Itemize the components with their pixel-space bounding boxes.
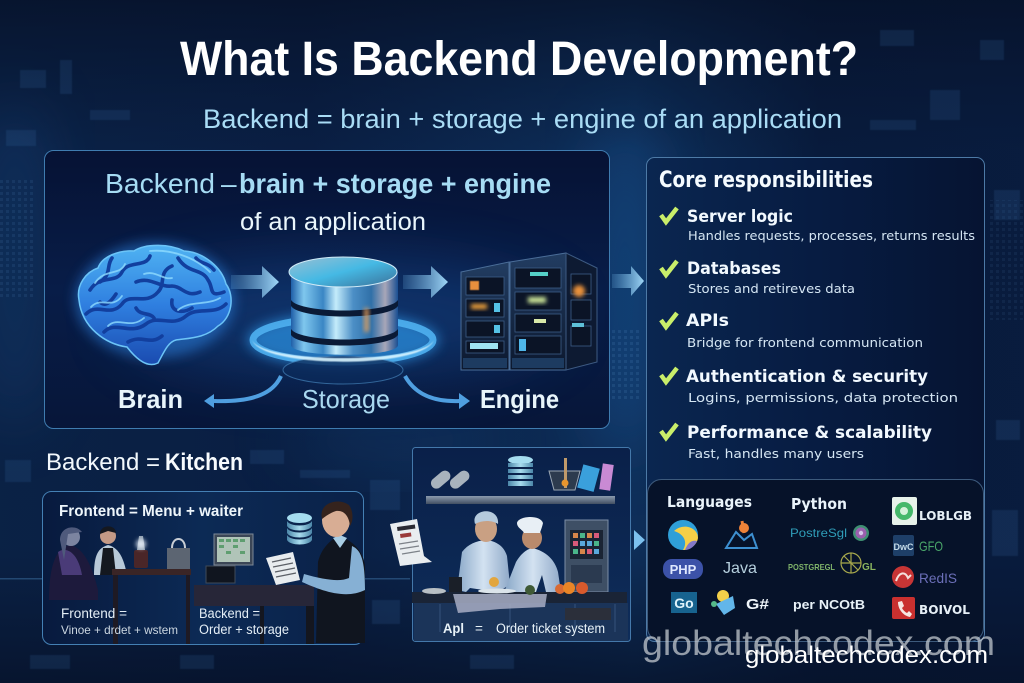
label: gl: GL	[862, 562, 876, 573]
icon: brain	[75, 242, 235, 365]
icon: green tile	[892, 497, 917, 525]
label: postresgl: PostreSgl	[790, 526, 847, 540]
item: server logic: Server logic	[687, 207, 793, 227]
item: databases: Databases	[687, 259, 781, 279]
illustration: fridge display	[565, 520, 608, 592]
icon: storage cylinder	[247, 257, 439, 384]
icon: kitchen database	[508, 456, 533, 486]
icon: globe	[841, 553, 861, 573]
arrow: storage to brain	[204, 376, 281, 408]
label: per ncotb: per NCOtB	[793, 597, 865, 612]
panel heading	[105, 168, 551, 236]
item: performance	[661, 423, 932, 461]
icon: java book	[726, 521, 757, 548]
label: boivol: BOIVOL	[919, 602, 970, 617]
item: performance: Fast, handles many users	[688, 446, 864, 461]
label: backend note	[199, 606, 289, 637]
panel: brain storage engine	[44, 150, 644, 428]
item: authentication	[661, 367, 958, 405]
illustration: kitchen counter	[412, 577, 628, 641]
arrow: to core responsibilities	[612, 266, 644, 296]
item: server logic: Handles requests, processes, returns results	[688, 228, 975, 243]
icon: server racks	[461, 253, 597, 370]
subtitle: Backend = brain + storage + engine of an application	[203, 104, 842, 134]
watermark: large: globaltechcodex.com	[642, 624, 995, 663]
label: frontend note	[61, 606, 178, 637]
arrow: kitchen to tech	[634, 530, 645, 550]
panel: technology logos	[648, 480, 984, 642]
shelf	[426, 496, 615, 504]
icon: database stack	[287, 513, 312, 544]
panel heading: brain + storage + engine	[239, 168, 551, 199]
panel heading: of an application	[240, 208, 426, 236]
item: apis	[661, 311, 923, 350]
illustration: chef left	[457, 511, 510, 592]
label: languages: Languages	[667, 493, 752, 511]
icon: round language logo	[668, 520, 698, 550]
panel: kitchen	[412, 448, 630, 642]
item: authentication: Authentication & security	[686, 367, 928, 387]
icon: feather logo	[711, 590, 735, 615]
illustration: waiter	[302, 501, 365, 643]
icon: php badge: PHP	[670, 562, 697, 577]
item: server logic	[661, 207, 975, 243]
label: frontend note: Frontend =	[61, 606, 127, 621]
item: apis: Bridge for frontend communication	[687, 335, 923, 350]
heading: backend kitchen	[46, 449, 243, 476]
label: engine: Engine	[480, 384, 559, 414]
icon: phone tile	[892, 597, 915, 619]
label: loblgb: LOBLGB	[919, 508, 972, 523]
icon: redis	[892, 566, 914, 588]
icon: order ticket	[390, 519, 432, 566]
item: databases	[661, 259, 855, 296]
icon: php badge	[663, 559, 703, 579]
panel: core responsibilities	[646, 158, 984, 642]
title: What Is Backend Development?	[180, 33, 858, 86]
label: brain: Brain	[118, 384, 183, 414]
panel: frontend and backend restaurant	[42, 492, 365, 644]
label: storage: Storage	[302, 384, 390, 414]
label: backend note: Order + storage	[199, 622, 289, 637]
panel heading: –	[221, 168, 237, 199]
label: frontend note: Vinoe + drdet + wstem	[61, 623, 178, 637]
label: g sharp: G#	[746, 596, 770, 613]
label: api order ticket system: Apl	[443, 621, 464, 636]
label: api order ticket system: Order ticket system	[496, 621, 605, 636]
item: authentication: Logins, permissions, data protection	[688, 390, 958, 405]
label: frontend menu waiter: Frontend = Menu + waiter	[59, 503, 243, 520]
icon: purple ring	[853, 525, 869, 541]
item: performance: Performance & scalability	[687, 423, 932, 443]
label: backend note: Backend =	[199, 606, 260, 621]
arrow: storage to engine	[403, 266, 448, 298]
illustration: order paper	[266, 552, 300, 585]
icon: basket and cards	[549, 458, 614, 492]
label: redis: RedIS	[919, 570, 957, 586]
heading: backend kitchen: Kitchen	[165, 449, 243, 476]
item: apis: APIs	[686, 311, 729, 331]
illustration: seated customers	[49, 526, 127, 600]
label: postgregl: POSTGREGL	[788, 562, 835, 572]
icon: go badge: Go	[674, 595, 694, 611]
arrow: storage to engine curved	[405, 376, 470, 409]
label: java: Java	[723, 560, 757, 577]
illustration: counter	[194, 585, 314, 644]
illustration: table with lamp and bag	[112, 536, 191, 644]
heading: core responsibilities: Core responsibilities	[659, 168, 873, 193]
watermark: small: globaltechcodex.com	[745, 642, 988, 669]
arrow: brain to storage	[231, 266, 279, 298]
icon: dark blue tile: DwC	[894, 542, 914, 552]
label: api order ticket system: =	[475, 621, 483, 636]
panel heading: Backend	[105, 168, 215, 199]
heading: backend kitchen: Backend =	[46, 449, 160, 476]
label: gfo: GFO	[919, 538, 943, 554]
label: api order ticket system	[443, 621, 605, 636]
icon: dark blue tile	[893, 535, 914, 556]
icon: go badge	[671, 592, 697, 613]
icon: pills on shelf	[429, 468, 472, 491]
item: databases: Stores and retireves data	[688, 281, 855, 296]
illustration: chef right	[505, 517, 561, 592]
illustration: monitor and till	[206, 534, 253, 583]
label: python: Python	[791, 495, 847, 513]
